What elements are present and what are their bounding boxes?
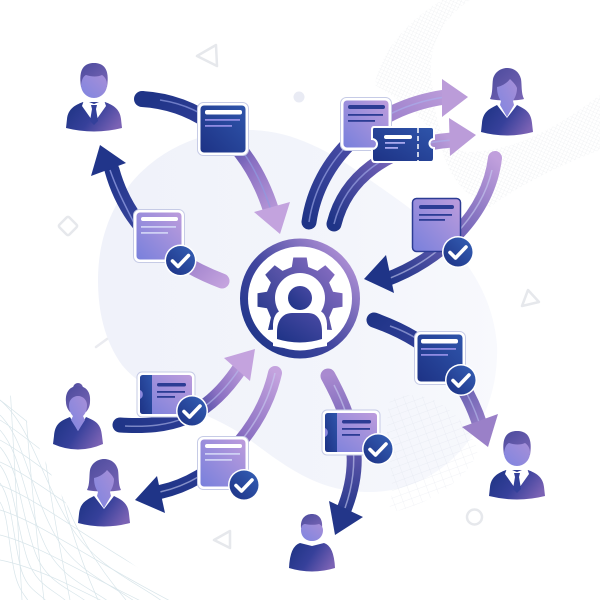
arrow: top-right person to hub <box>364 158 495 293</box>
document: light lower centre <box>198 436 248 490</box>
person: woman with bun lower left <box>53 383 103 450</box>
document: dark top-left <box>198 102 248 156</box>
check badge: bottom centre ticket <box>362 433 394 465</box>
check badge: lower left ticket <box>176 395 208 427</box>
ticket: light lower left <box>137 372 195 417</box>
arrow: hub to bottom-centre person <box>328 376 363 535</box>
person: man bottom centre <box>289 514 335 572</box>
mesh: lower centre <box>387 395 478 512</box>
ticket: light bottom centre <box>322 410 380 455</box>
arrow: lower-left person to hub <box>120 349 255 426</box>
check badge: lower centre document <box>228 469 260 501</box>
mesh: top right <box>375 0 600 207</box>
person: woman top right <box>481 68 533 136</box>
arrow: top-left person to hub <box>134 91 290 234</box>
central hub icon <box>244 242 356 354</box>
person: woman lower left <box>78 459 130 526</box>
arrow: hub to bottom-right person <box>374 320 498 447</box>
decorative dot <box>294 92 304 102</box>
arrow: ticket from hub to top-right person <box>334 118 476 224</box>
document: dark lower right <box>414 332 466 384</box>
decorative triangle: right <box>522 290 539 306</box>
arrow: hub to top-right person <box>309 79 468 222</box>
person: man bottom right <box>489 431 545 500</box>
document: outlined right <box>412 198 460 252</box>
hub ring <box>244 242 356 354</box>
decorative ring <box>467 510 482 524</box>
person: man top left <box>66 63 122 132</box>
check badge: left document <box>164 244 196 276</box>
decorative triangle: top <box>197 45 217 66</box>
document: light approved left <box>134 210 184 262</box>
document: light top centre <box>340 98 392 150</box>
decorative diamond <box>58 216 78 236</box>
decorative tick <box>96 339 107 347</box>
hub person head <box>288 286 312 310</box>
ticket: dark top centre <box>372 127 434 162</box>
check badge: right document <box>442 236 474 268</box>
arrow: hub to top-left person <box>91 145 222 281</box>
background blob <box>98 130 497 492</box>
arrow: hub to lower-left woman <box>135 373 275 513</box>
hub gear <box>258 258 342 349</box>
check badge: lower right document <box>445 364 477 396</box>
decorative triangle: bottom <box>214 531 230 548</box>
mesh: lower left <box>0 385 178 600</box>
hub person body <box>277 313 322 342</box>
